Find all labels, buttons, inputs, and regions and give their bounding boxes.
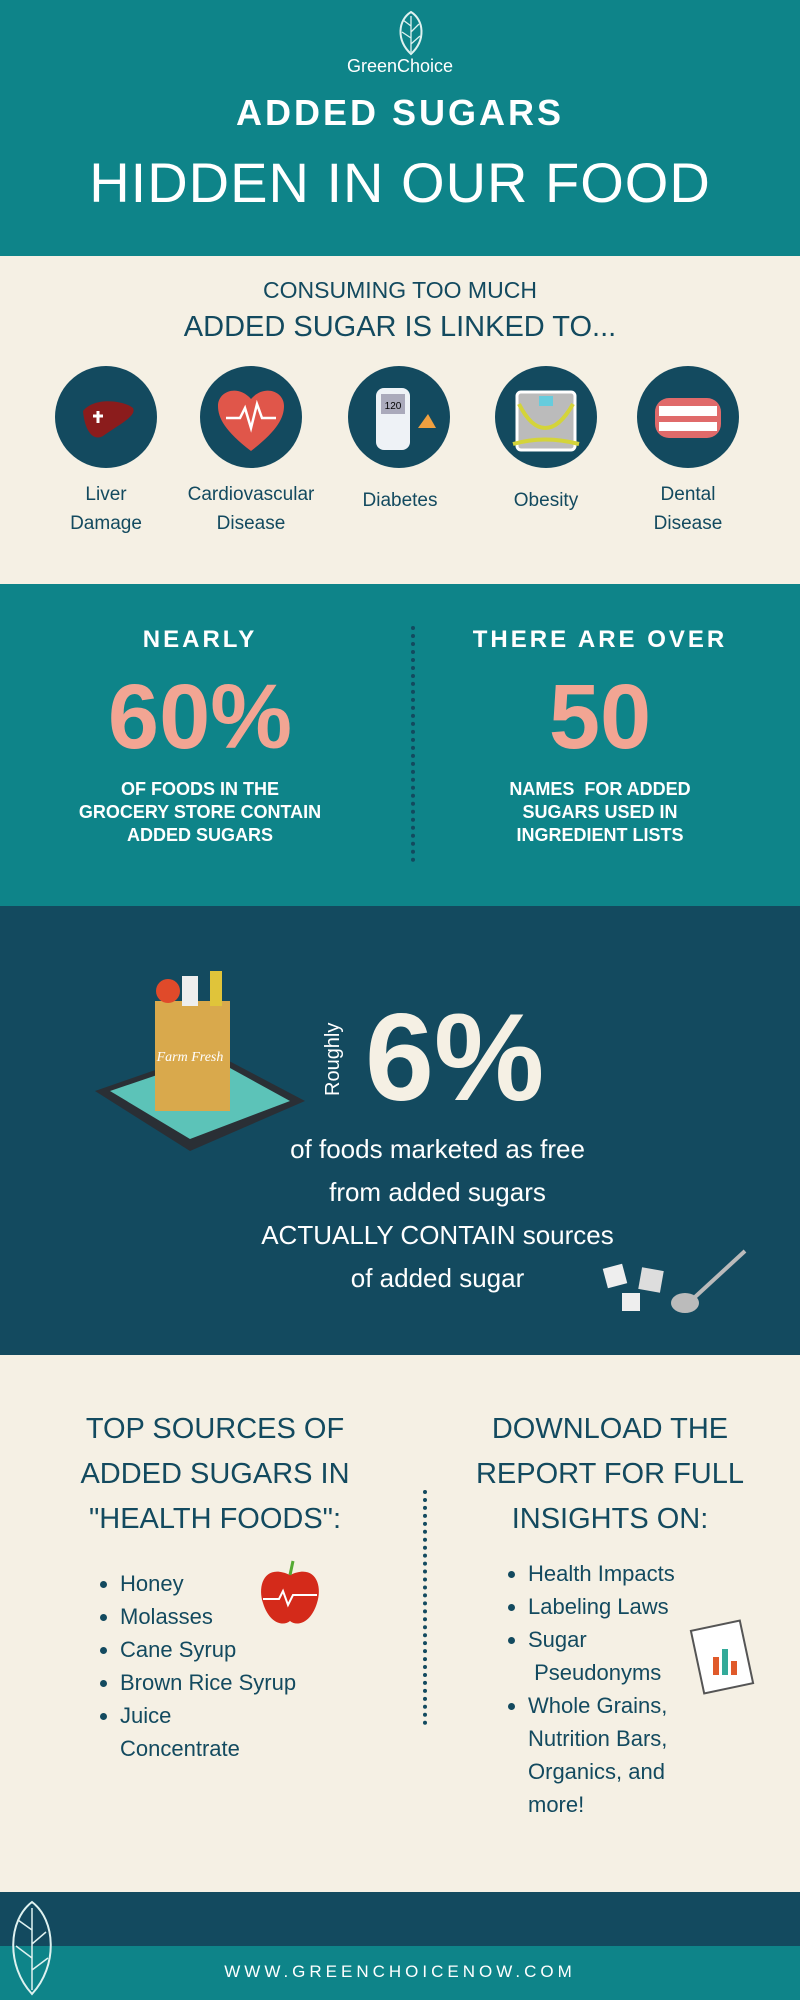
icon: footer leaf	[12, 1900, 52, 1996]
label: cardiovascular	[188, 484, 314, 534]
title line 1: ADDED SUGARS	[236, 92, 564, 133]
stat: 50	[473, 626, 727, 845]
heading: top sources: "HEALTH FOODS":	[89, 1503, 341, 1535]
header panel	[0, 0, 800, 256]
list: report topics	[508, 1561, 675, 1817]
stat: 60%: NEARLY	[143, 626, 257, 653]
label: dental: Dental	[661, 484, 715, 505]
heading: ADDED SUGAR IS LINKED TO...	[184, 311, 616, 343]
label: dental: Disease	[654, 513, 722, 534]
panel: 6%	[0, 906, 800, 1355]
big number: 6%	[365, 989, 544, 1127]
list: report topics: Pseudonyms	[534, 1660, 661, 1685]
label: cardiovascular: Disease	[217, 513, 285, 534]
description	[261, 1134, 614, 1293]
rotated label: Roughly	[322, 1023, 344, 1096]
heading: top sources	[80, 1413, 350, 1535]
stat: 50: INGREDIENT LISTS	[516, 825, 684, 845]
heading: top sources: TOP SOURCES OF	[86, 1413, 344, 1445]
icon: scale	[495, 366, 597, 468]
label: liver: Damage	[70, 513, 142, 534]
list: report topics: Whole Grains, Nutrition Bars, Organics, and more!	[528, 1693, 667, 1817]
icon: sugar cubes and spoon	[602, 1250, 746, 1313]
stat: 50: NAMES FOR ADDED	[509, 779, 691, 799]
stat: 50: 50	[549, 666, 651, 768]
footer	[0, 1892, 800, 2000]
icon: apple	[261, 1560, 319, 1624]
heading: CONSUMING TOO MUCH	[263, 277, 537, 303]
list: report topics: Labeling Laws	[528, 1594, 669, 1619]
icon: glucose meter	[348, 366, 450, 468]
list: sources: Juice	[120, 1703, 171, 1728]
list: sources: Concentrate	[120, 1736, 240, 1761]
label: liver	[70, 484, 142, 534]
icon: grocery bag on phone	[95, 971, 305, 1151]
stat: 60%: GROCERY STORE CONTAIN	[79, 802, 321, 822]
label: diabetes: Diabetes	[362, 490, 438, 511]
panel: stats	[0, 584, 800, 906]
heading	[184, 277, 616, 343]
description: ACTUALLY CONTAIN sources	[261, 1220, 614, 1250]
list: sources: Honey	[120, 1571, 184, 1596]
icon: teeth	[637, 366, 739, 468]
label: obesity: Obesity	[514, 490, 578, 511]
list: report topics: Health Impacts	[528, 1561, 675, 1586]
panel: sources and report	[0, 1355, 800, 1892]
icon: heart	[200, 366, 302, 468]
stat: 50: THERE ARE OVER	[473, 626, 727, 653]
icon: leaf logo	[400, 10, 422, 56]
description: of foods marketed as free	[290, 1134, 585, 1164]
stat: 60%: OF FOODS IN THE	[121, 779, 279, 799]
icon: report	[690, 1619, 754, 1695]
panel: linked diseases	[0, 256, 800, 584]
heading: download report: REPORT FOR FULL	[476, 1458, 744, 1490]
list: sources	[100, 1571, 296, 1761]
heading: download report: INSIGHTS ON:	[512, 1503, 708, 1535]
description: of added sugar	[351, 1263, 524, 1293]
stat: 60%	[79, 626, 321, 845]
icon: grocery bag on phone: Farm Fresh	[156, 1050, 223, 1065]
list: sources: Brown Rice Syrup	[120, 1670, 296, 1695]
label: liver: Liver	[85, 484, 127, 505]
list: sources: Cane Syrup	[120, 1637, 236, 1662]
heading: top sources: ADDED SUGARS IN	[80, 1458, 350, 1490]
website url: WWW.GREENCHOICENOW.COM	[224, 1962, 576, 1981]
icon: liver	[55, 366, 157, 468]
heading: download report	[476, 1413, 744, 1535]
label: dental	[654, 484, 722, 534]
title line 2: HIDDEN IN OUR FOOD	[89, 151, 711, 214]
description: from added sugars	[329, 1177, 546, 1207]
heading: download report: DOWNLOAD THE	[492, 1413, 728, 1445]
stat: 60%: ADDED SUGARS	[127, 825, 273, 845]
list: sources: Molasses	[120, 1604, 213, 1629]
list: report topics: Sugar	[528, 1627, 587, 1652]
stat: 60%: 60%	[108, 666, 292, 768]
brand name: GreenChoice	[347, 56, 453, 76]
label: cardiovascular: Cardiovascular	[188, 484, 314, 505]
icon: glucose meter: 120	[385, 401, 402, 412]
stat: 50: SUGARS USED IN	[522, 802, 678, 822]
